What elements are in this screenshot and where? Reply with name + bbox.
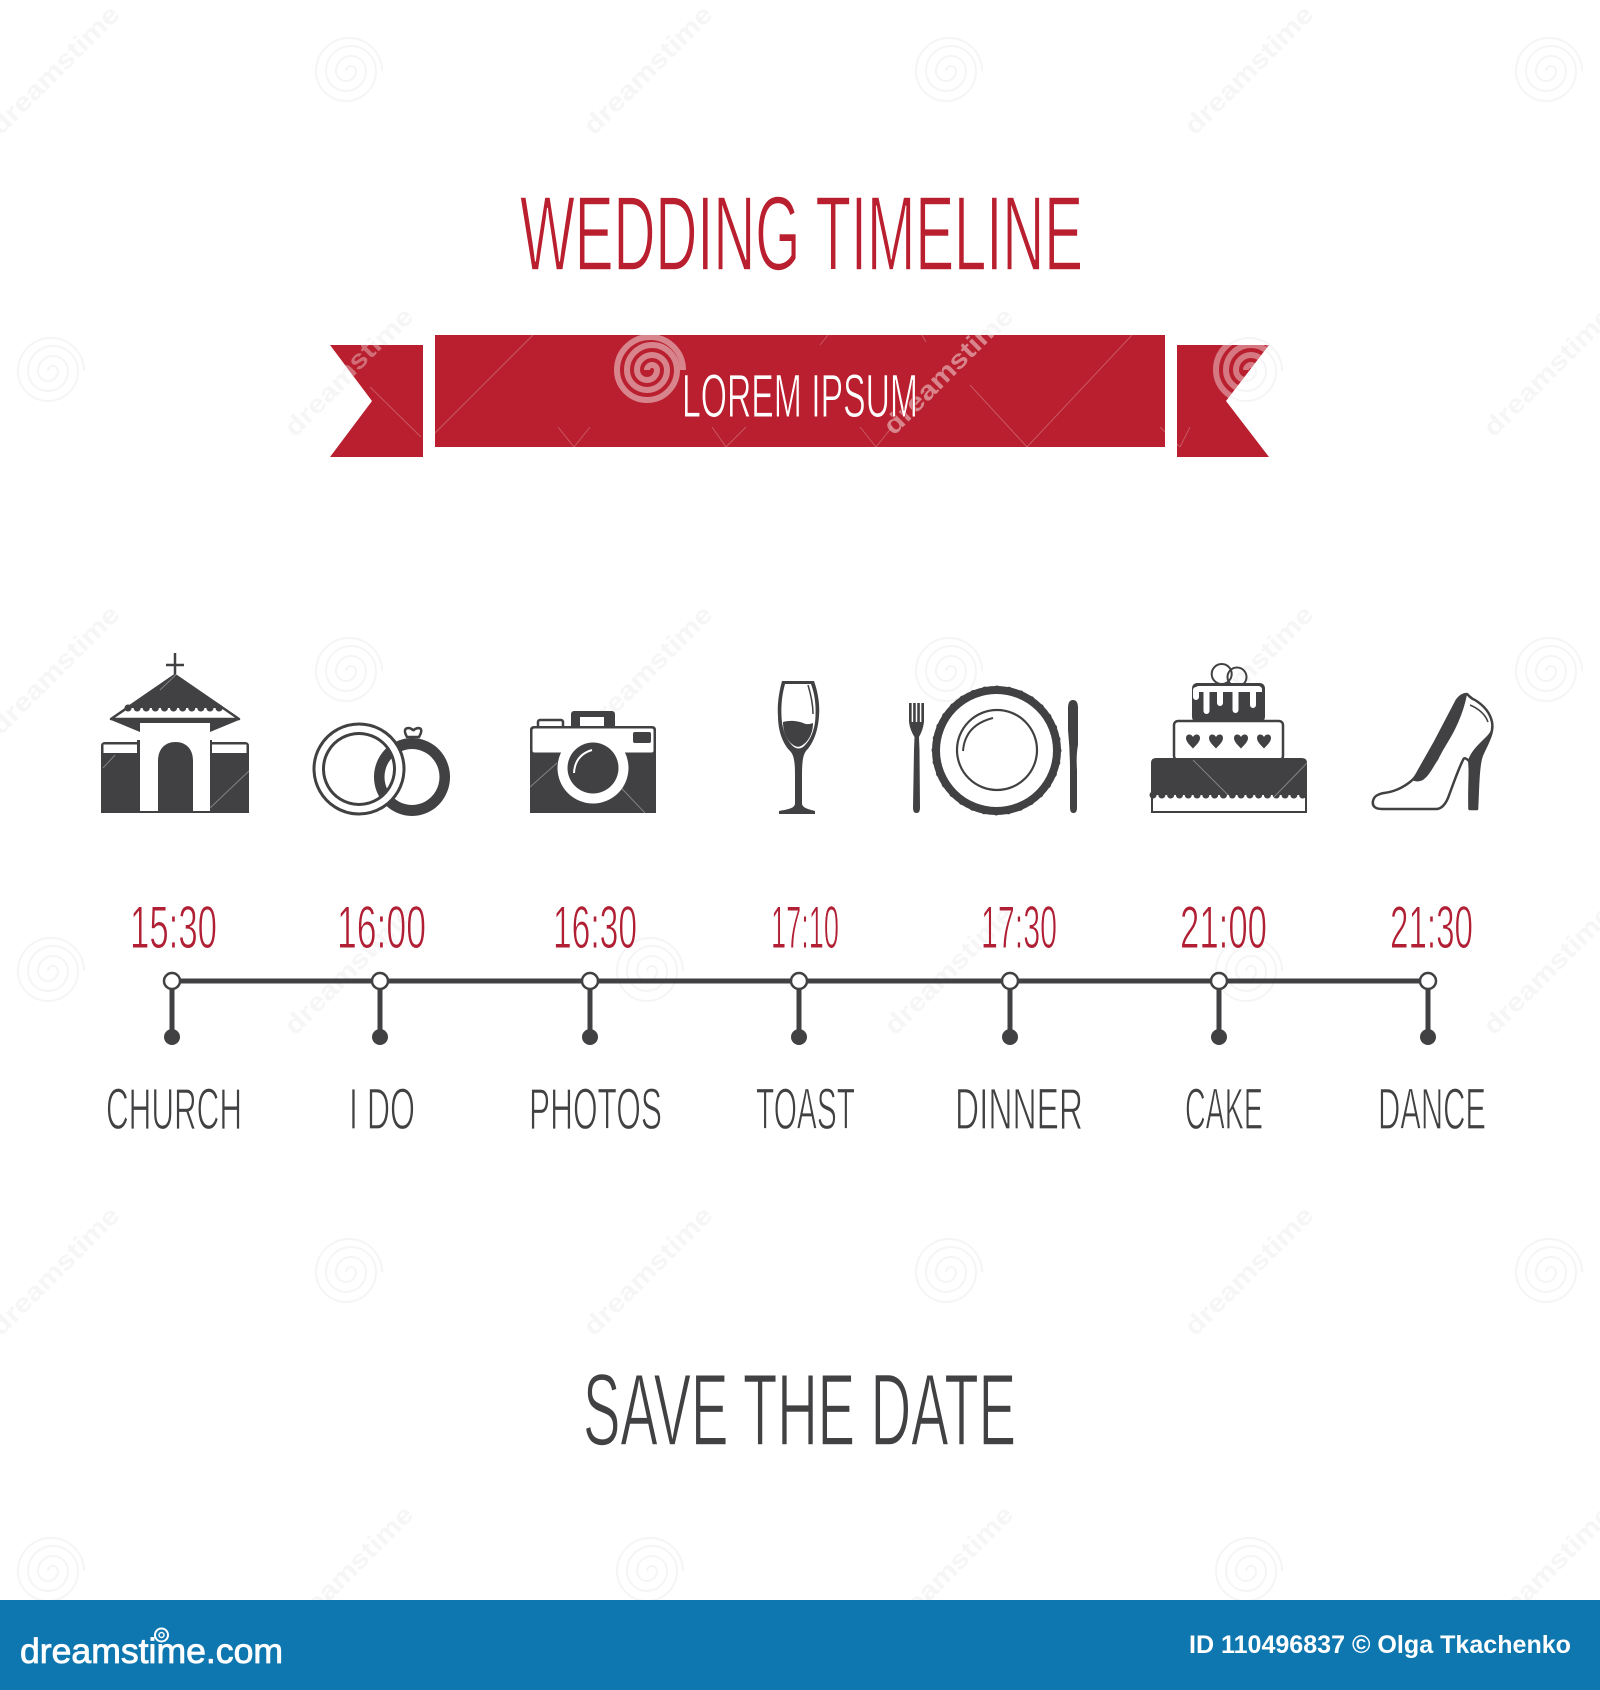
ribbon banner: dreamstime (877, 299, 1018, 440)
text: dreamstime (1477, 899, 1600, 1040)
text: dreamstime (1477, 301, 1600, 442)
event labels: PHOTOS (529, 1077, 662, 1142)
event labels: TOAST (756, 1077, 855, 1142)
time labels: 21:00 (1180, 894, 1267, 961)
event labels: I DO (349, 1077, 415, 1142)
save the date heading: SAVE THE DATE (583, 1353, 1016, 1467)
event labels: DINNER (955, 1077, 1083, 1142)
event labels: CAKE (1185, 1077, 1263, 1142)
event labels: CHURCH (106, 1077, 242, 1142)
time labels: 21:30 (1390, 894, 1473, 961)
ribbon banner (330, 335, 1269, 457)
event labels: DANCE (1378, 1077, 1486, 1142)
text: dreamstime (577, 1200, 718, 1341)
icon: camera (530, 711, 656, 813)
time labels: 17:10 (771, 894, 839, 961)
text: dreamstime (278, 301, 419, 442)
footer logo: dreamstime.com (20, 1632, 283, 1671)
text: dreamstime (1178, 1200, 1319, 1341)
icon: high heel shoe (1373, 694, 1492, 809)
text: dreamstime (878, 301, 1019, 442)
icon: wedding cake (1151, 664, 1307, 813)
ribbon main band (435, 335, 1165, 447)
ribbon banner: dreamstime (277, 299, 418, 440)
text: dreamstime (1477, 1499, 1600, 1640)
icon: plate with fork and knife (909, 688, 1078, 813)
text: dreamstime (1178, 599, 1319, 740)
icon: wedding rings (314, 724, 450, 816)
time labels: 15:30 (130, 894, 217, 961)
time labels: 16:30 (553, 894, 637, 961)
ribbon right tail (1177, 345, 1269, 457)
text: dreamstime (577, 599, 718, 740)
text: dreamstime (1178, 0, 1319, 140)
timeline (164, 973, 1436, 1045)
icon: champagne glass (778, 681, 819, 814)
footer credit: ID 110496837 © Olga Tkachenko (1189, 1631, 1571, 1659)
title: WEDDING TIMELINE (520, 175, 1083, 293)
text: dreamstime (577, 0, 718, 140)
text: dreamstime (878, 1499, 1019, 1640)
time labels (130, 894, 1473, 961)
ribbon left tail (330, 345, 423, 457)
text: dreamstime (278, 899, 419, 1040)
time labels: 17:30 (981, 894, 1057, 961)
icon: church (101, 653, 250, 813)
ribbon text: LOREM IPSUM (682, 362, 918, 430)
time labels: 16:00 (337, 894, 426, 961)
text: dreamstime (878, 899, 1019, 1040)
event labels (106, 1077, 1486, 1142)
footer bar (0, 1600, 1600, 1690)
text: dreamstime (278, 1499, 419, 1640)
